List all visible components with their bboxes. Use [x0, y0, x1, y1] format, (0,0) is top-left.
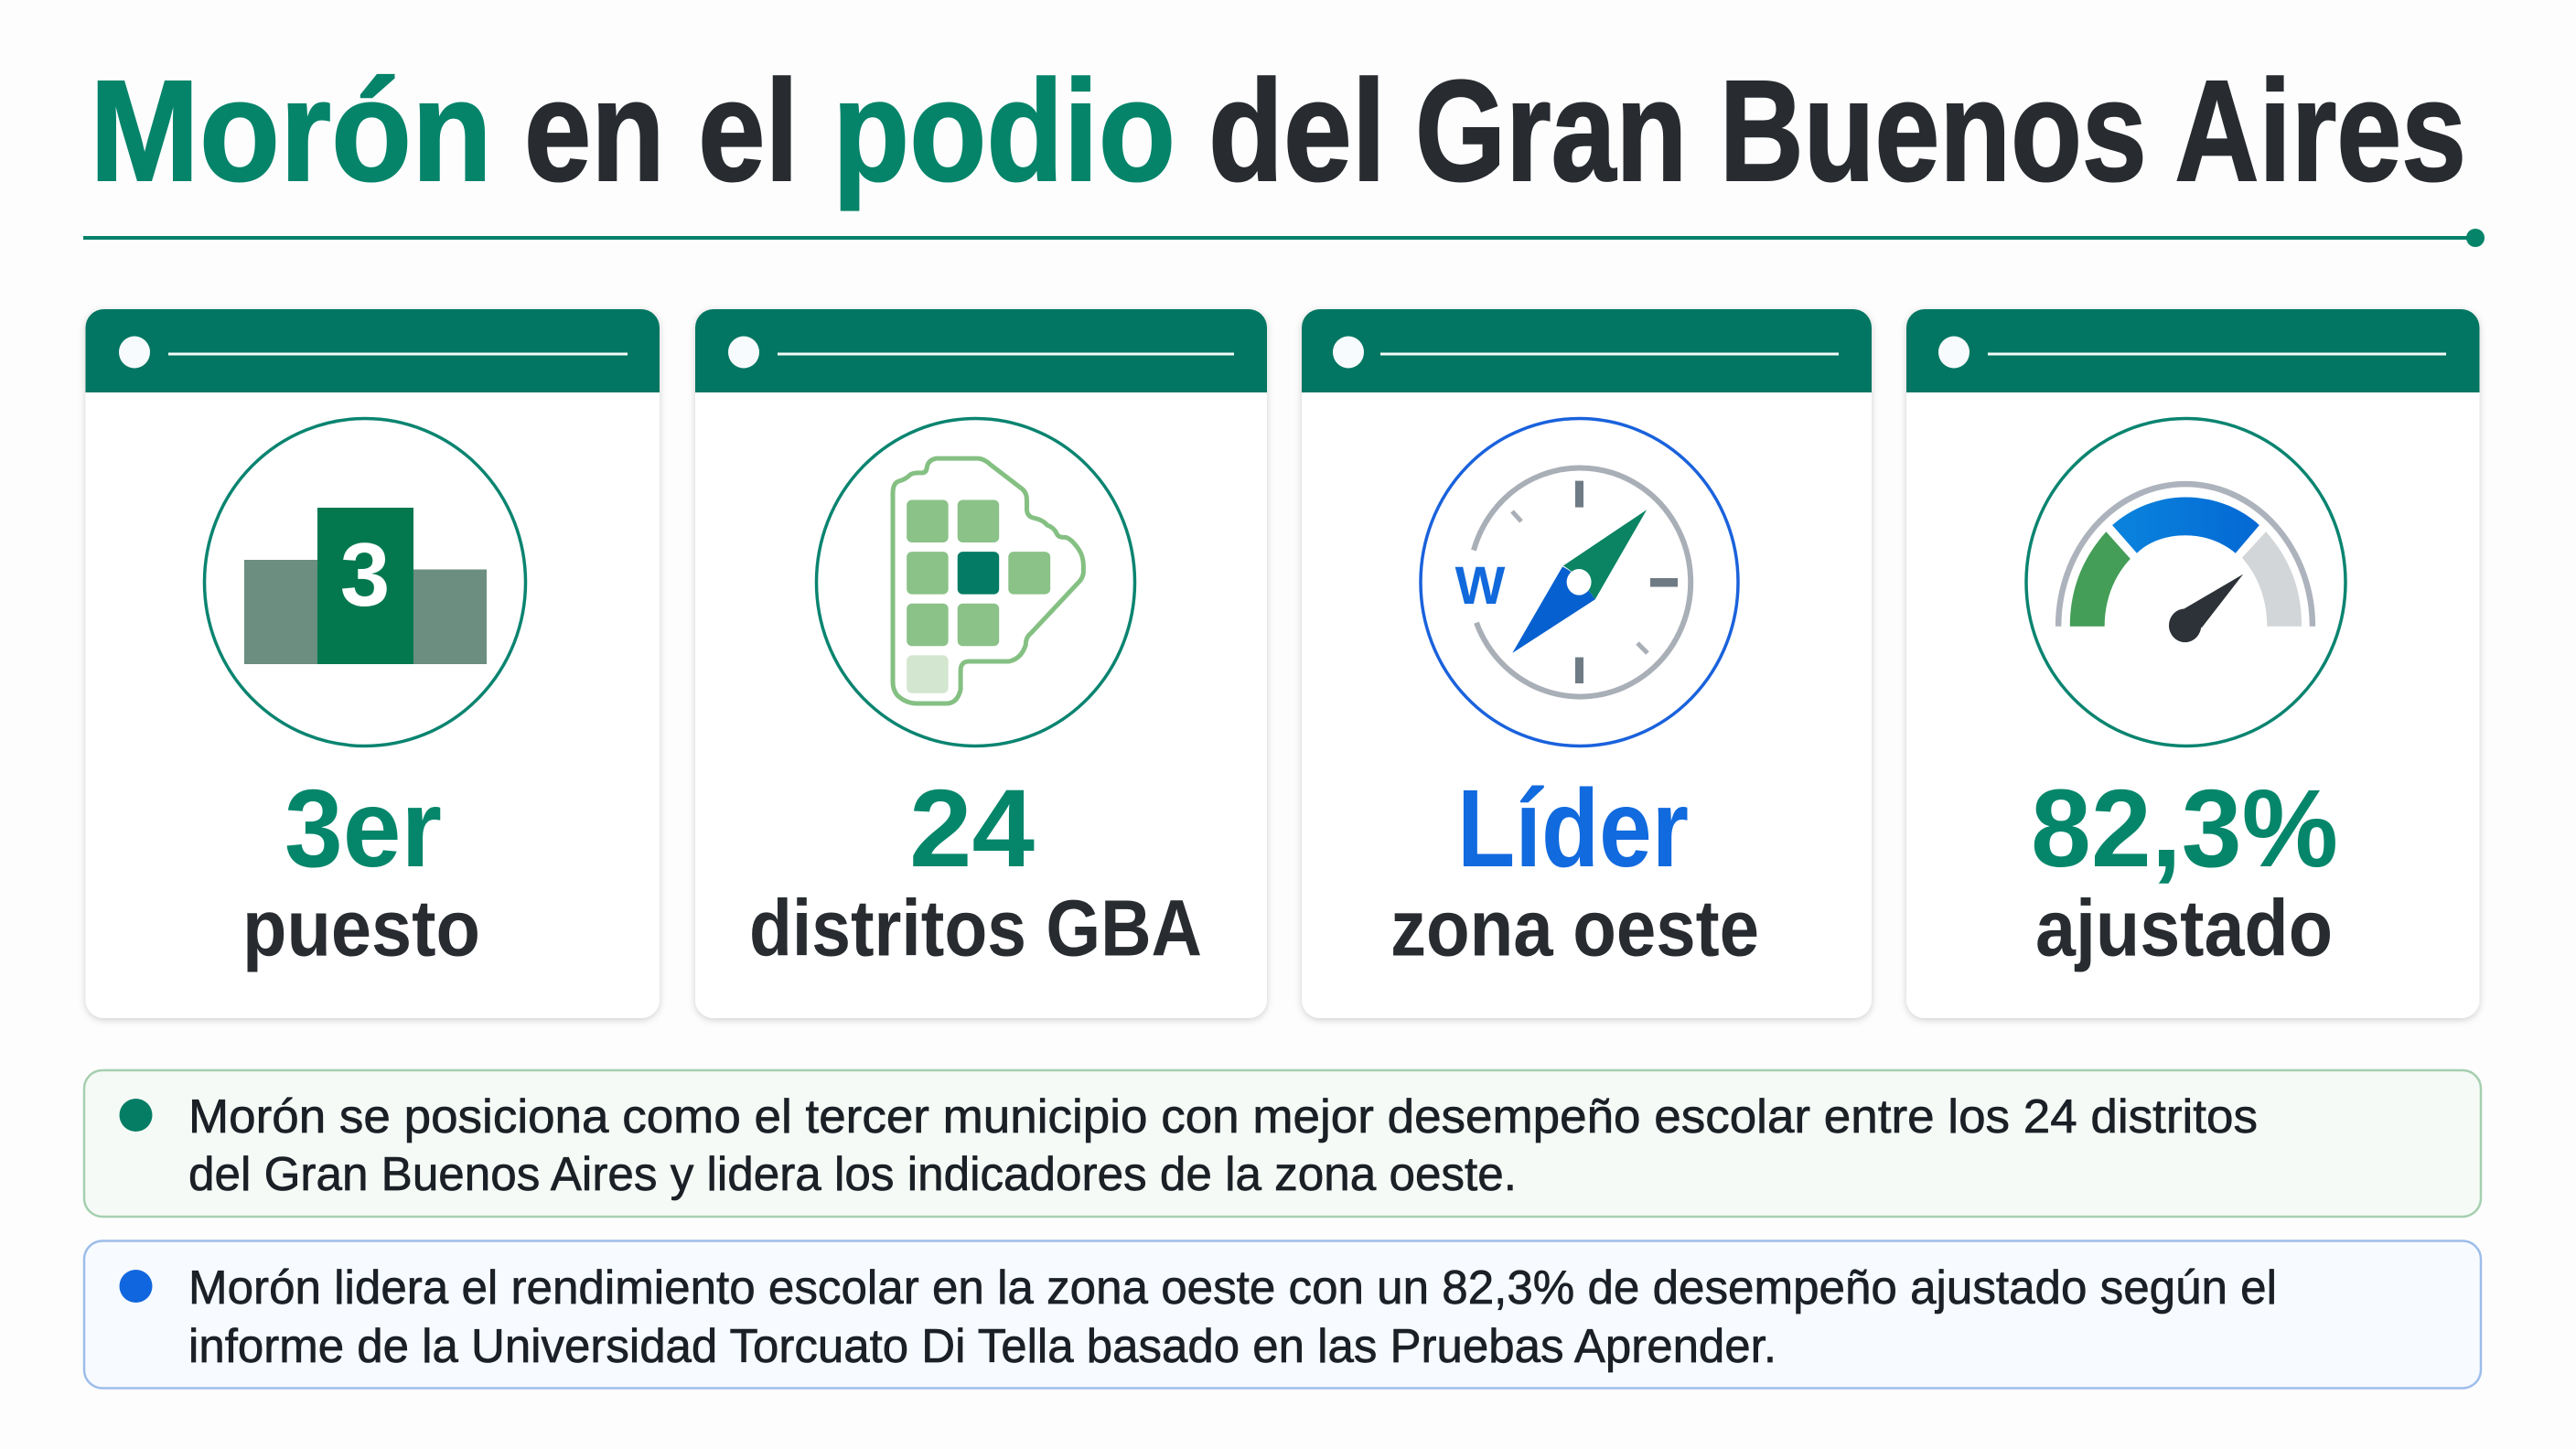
- icon: podium: [205, 419, 525, 746]
- panel: Líder zona oeste: [1302, 309, 1872, 1018]
- panel: 3er puesto: [86, 309, 660, 1018]
- icon: district map: [816, 419, 1134, 746]
- label: ajustado: ajustado: [2035, 884, 2333, 973]
- title rule with end dot: [83, 229, 2485, 247]
- title: en el: [524, 51, 799, 211]
- icon: gauge: [2026, 419, 2345, 746]
- callout text: Morón se posiciona como el tercer municipio con mejor desempeño escolar entre los 24 distritos: [188, 1090, 2258, 1143]
- big number: 24: 24: [909, 766, 1035, 890]
- card header: [1906, 309, 2479, 392]
- label: zona oeste: zona oeste: [1390, 884, 1759, 973]
- callout text: [188, 1261, 2277, 1373]
- big number: 3er: 3er: [284, 766, 442, 890]
- title: podio: [832, 51, 1175, 211]
- callout text: del Gran Buenos Aires y lidera los indicadores de la zona oeste.: [188, 1148, 1517, 1201]
- title: Morón: [90, 51, 492, 211]
- callout text: informe de la Universidad Torcuato Di Tella basado en las Pruebas Aprender.: [188, 1320, 1776, 1373]
- bullet: blue: [119, 1270, 152, 1303]
- bullet: green: [119, 1099, 152, 1132]
- label: distritos GBA: distritos GBA: [749, 884, 1202, 973]
- icon: podium: 3: [340, 524, 390, 625]
- icon: compass: [1421, 419, 1738, 746]
- panel: 82,3% ajustado: [1906, 309, 2479, 1018]
- big number: Líder: Líder: [1457, 766, 1689, 890]
- card header: [86, 309, 660, 392]
- big number: 82,3%: 82,3%: [2031, 766, 2338, 890]
- callout text: [188, 1090, 2258, 1201]
- panel: 24 distritos GBA: [695, 309, 1267, 1018]
- card header: [1302, 309, 1872, 392]
- title: del: [1208, 51, 1386, 211]
- icon: compass: W: [1455, 556, 1506, 616]
- callout: tercer municipio: [84, 1070, 2481, 1217]
- callout: 82,3% según informe: [84, 1240, 2481, 1389]
- label: puesto: puesto: [242, 884, 480, 973]
- callout text: Morón lidera el rendimiento escolar en la zona oeste con un 82,3% de desempeño ajustado según el: [188, 1261, 2277, 1315]
- card header: [695, 309, 1267, 392]
- title: [90, 51, 2466, 211]
